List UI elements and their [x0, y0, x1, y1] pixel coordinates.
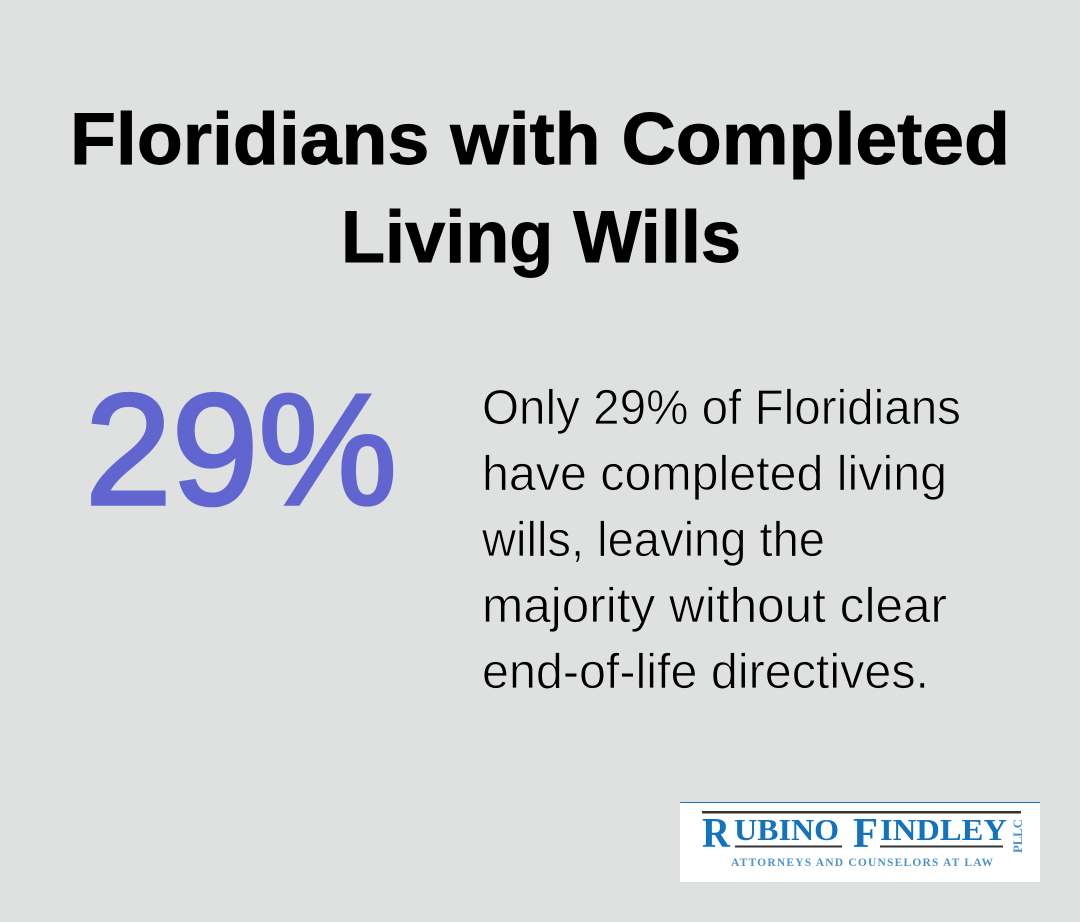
logo: Rubino Findley: PLLC — [1010, 819, 1025, 853]
logo: Rubino Findley: INDLEY — [880, 812, 1007, 847]
logo: Rubino Findley: F — [853, 811, 878, 857]
description text: Only 29% of Floridians — [482, 381, 961, 435]
description text: majority without clear — [482, 579, 947, 633]
logo: Rubino Findley: ATTORNEYS AND COUNSELORS AT LAW — [731, 857, 994, 869]
logo: Rubino Findley: R — [702, 811, 731, 857]
statistic: 29%: 29% — [85, 362, 397, 538]
title — [70, 99, 1010, 278]
description text — [481, 381, 961, 699]
logo: Rubino Findley: UBINO — [734, 812, 839, 847]
description text: end-of-life directives. — [482, 645, 929, 699]
description text: have completed living — [482, 447, 947, 501]
title: Floridians with Completed — [70, 99, 1010, 180]
logo: Rubino Findley — [680, 802, 1040, 882]
title: Living Wills — [341, 197, 741, 278]
description text: wills, leaving the — [481, 513, 825, 567]
